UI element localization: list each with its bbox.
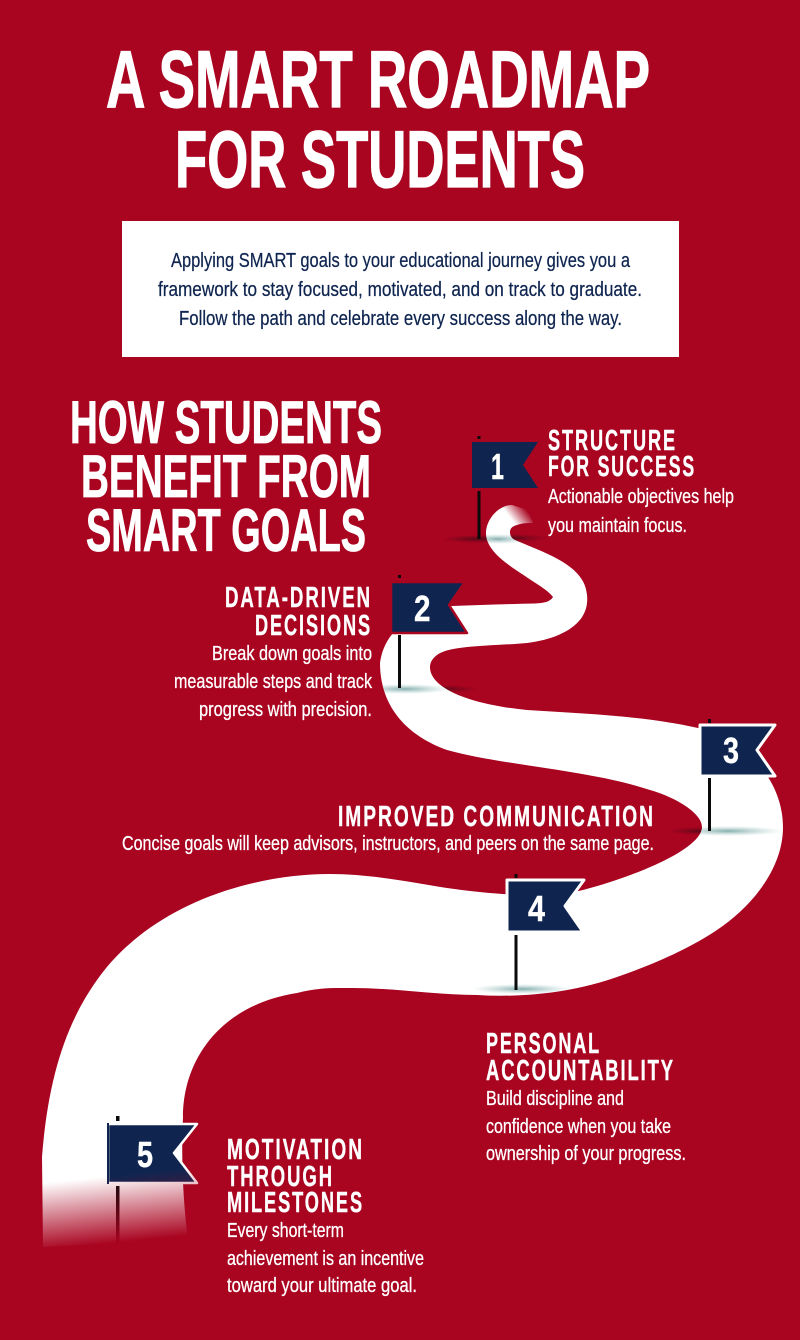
road bottom fade bbox=[35, 1170, 200, 1255]
intro box bbox=[122, 221, 679, 357]
flag 3: 3 bbox=[723, 730, 739, 771]
benefit 4: PERSONAL bbox=[486, 1028, 601, 1060]
benefit 2: DATA-DRIVEN bbox=[225, 582, 372, 614]
flag 3 bbox=[700, 719, 775, 831]
benefit 3 bbox=[122, 801, 655, 855]
benefit 5: achievement is an incentive bbox=[227, 1248, 424, 1270]
benefit 4: confidence when you take bbox=[486, 1116, 671, 1138]
benefit 5: THROUGH bbox=[227, 1161, 334, 1193]
section heading: BENEFIT FROM bbox=[81, 443, 371, 510]
benefit 1: FOR SUCCESS bbox=[548, 451, 696, 483]
benefit 5: Every short-term bbox=[227, 1220, 344, 1242]
benefit 2 bbox=[174, 582, 373, 721]
flag 4: 4 bbox=[528, 888, 545, 929]
benefit 4: Build discipline and bbox=[486, 1088, 624, 1110]
benefit 1: STRUCTURE bbox=[548, 425, 677, 457]
flag 2 bbox=[391, 575, 467, 688]
flag 5 bbox=[107, 1116, 197, 1244]
benefit 3: Concise goals will keep advisors, instructors, and peers on the same page. bbox=[122, 833, 654, 855]
flag 5: 5 bbox=[137, 1134, 153, 1175]
benefit 5: MILESTONES bbox=[227, 1187, 364, 1219]
benefit 1 bbox=[548, 425, 734, 537]
benefit 5 bbox=[227, 1134, 424, 1297]
flag 2: 2 bbox=[414, 588, 430, 629]
benefit 2: Break down goals into bbox=[212, 643, 372, 665]
winding road bbox=[42, 505, 783, 1247]
intro box: framework to stay focused, motivated, and on track to graduate. bbox=[158, 279, 642, 301]
flag 4 bbox=[507, 874, 584, 990]
benefit 2: progress with precision. bbox=[199, 699, 372, 721]
intro box: Follow the path and celebrate every success along the way. bbox=[179, 308, 622, 330]
benefit 2: DECISIONS bbox=[255, 610, 372, 642]
benefit 4 bbox=[486, 1028, 686, 1165]
benefit 1: Actionable objectives help bbox=[548, 486, 734, 508]
title: FOR STUDENTS bbox=[175, 115, 585, 205]
flag 1 bbox=[472, 436, 538, 539]
title bbox=[106, 35, 650, 205]
section heading bbox=[70, 389, 382, 564]
benefit 4: ACCOUNTABILITY bbox=[486, 1055, 675, 1087]
section heading: SMART GOALS bbox=[86, 497, 366, 564]
intro box: Applying SMART goals to your educational journey gives you a bbox=[171, 250, 631, 272]
flag 1: 1 bbox=[491, 446, 504, 487]
benefit 2: measurable steps and track bbox=[174, 671, 373, 693]
benefit 1: you maintain focus. bbox=[548, 515, 687, 537]
benefit 5: MOTIVATION bbox=[227, 1134, 364, 1166]
section heading: HOW STUDENTS bbox=[70, 389, 382, 456]
benefit 4: ownership of your progress. bbox=[486, 1143, 686, 1165]
benefit 5: toward your ultimate goal. bbox=[227, 1275, 417, 1297]
